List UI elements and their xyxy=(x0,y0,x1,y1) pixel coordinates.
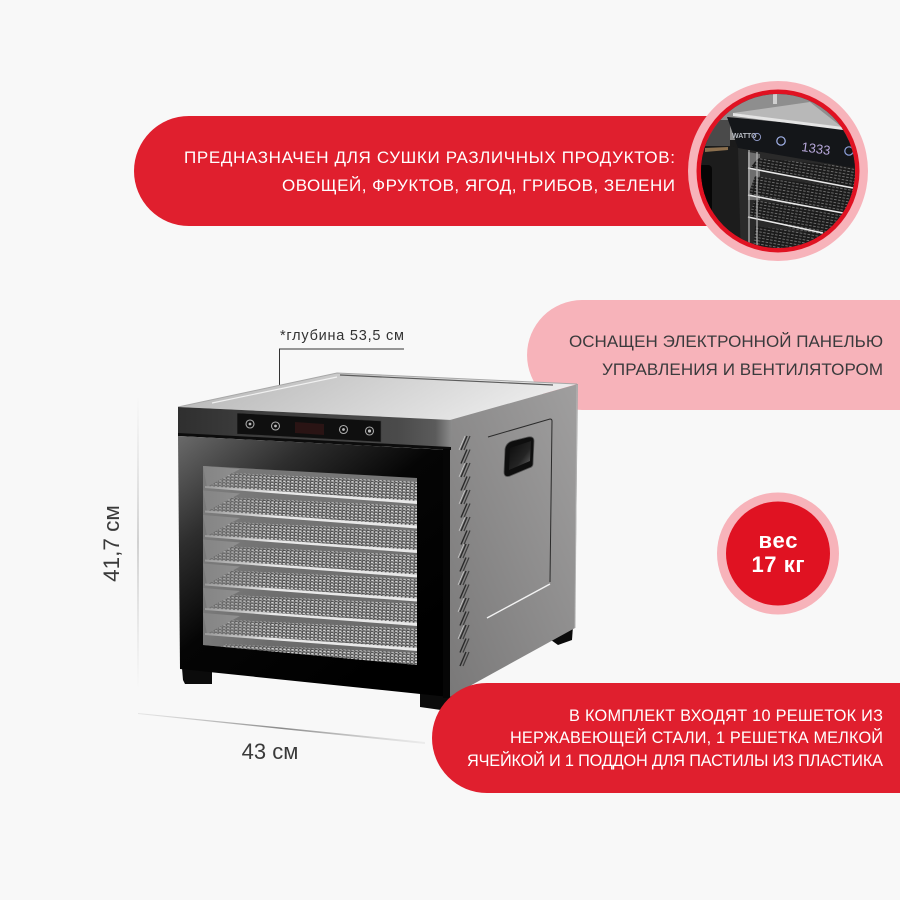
badge: weight xyxy=(717,492,839,614)
dimension: width: 43 см xyxy=(242,739,298,764)
control display: 1333 xyxy=(801,139,831,158)
text: weight: вес xyxy=(758,528,798,553)
top face xyxy=(178,373,577,420)
infographic canvas xyxy=(104,81,900,793)
text: electronic control xyxy=(569,332,883,379)
panel: electronic control xyxy=(527,300,900,410)
side face xyxy=(448,384,578,698)
text: weight xyxy=(752,528,804,577)
dimension: depth xyxy=(280,328,404,393)
feet xyxy=(182,626,573,710)
rack 2 xyxy=(203,490,417,528)
window with drying racks xyxy=(203,466,417,672)
rack 7 xyxy=(203,613,417,651)
rack 6 xyxy=(203,588,417,626)
control display: WATTO xyxy=(732,133,757,140)
text: drying purpose: ОВОЩЕЙ, ФРУКТОВ, ЯГОД, ГРИБОВ, ЗЕЛЕНИ xyxy=(282,176,675,195)
rack 3 xyxy=(203,515,417,553)
handle xyxy=(504,437,534,476)
side panel outline xyxy=(488,419,552,582)
door xyxy=(178,436,449,697)
panel: drying purpose xyxy=(134,116,730,226)
text: drying purpose: ПРЕДНАЗНАЧЕН ДЛЯ СУШКИ РАЗЛИЧНЫХ ПРОДУКТОВ: xyxy=(184,148,675,167)
dimension: width xyxy=(138,713,425,764)
text: drying purpose xyxy=(184,148,675,195)
rack 1 xyxy=(203,466,417,504)
text: weight: 17 кг xyxy=(752,552,804,577)
text: package contents xyxy=(467,707,883,770)
dimension: height: 41,7 см xyxy=(99,505,124,582)
dimension: depth: *глубина 53,5 см xyxy=(280,328,404,344)
vents xyxy=(460,436,467,666)
text: package contents: НЕРЖАВЕЮЩЕЙ СТАЛИ, 1 РЕШЕТКА МЕЛКОЙ xyxy=(510,728,883,747)
dehydrator illustration xyxy=(178,373,578,710)
rack 8 xyxy=(222,644,417,665)
control display xyxy=(732,133,853,158)
rack 5 xyxy=(203,564,417,602)
control panel xyxy=(237,413,381,442)
rack 4 xyxy=(203,540,417,578)
front band xyxy=(178,407,452,449)
text: package contents: ЯЧЕЙКОЙ И 1 ПОДДОН ДЛЯ ПАСТИЛЫ ИЗ ПЛАСТИКА xyxy=(467,751,883,770)
text: package contents: В КОМПЛЕКТ ВХОДЯТ 10 РЕШЕТОК ИЗ xyxy=(569,707,883,725)
icon: circular product photo xyxy=(688,81,868,261)
text: electronic control: УПРАВЛЕНИЯ И ВЕНТИЛЯТОРОМ xyxy=(602,360,883,379)
panel: package contents xyxy=(432,683,900,793)
text: electronic control: ОСНАЩЕН ЭЛЕКТРОННОЙ ПАНЕЛЬЮ xyxy=(569,332,883,351)
